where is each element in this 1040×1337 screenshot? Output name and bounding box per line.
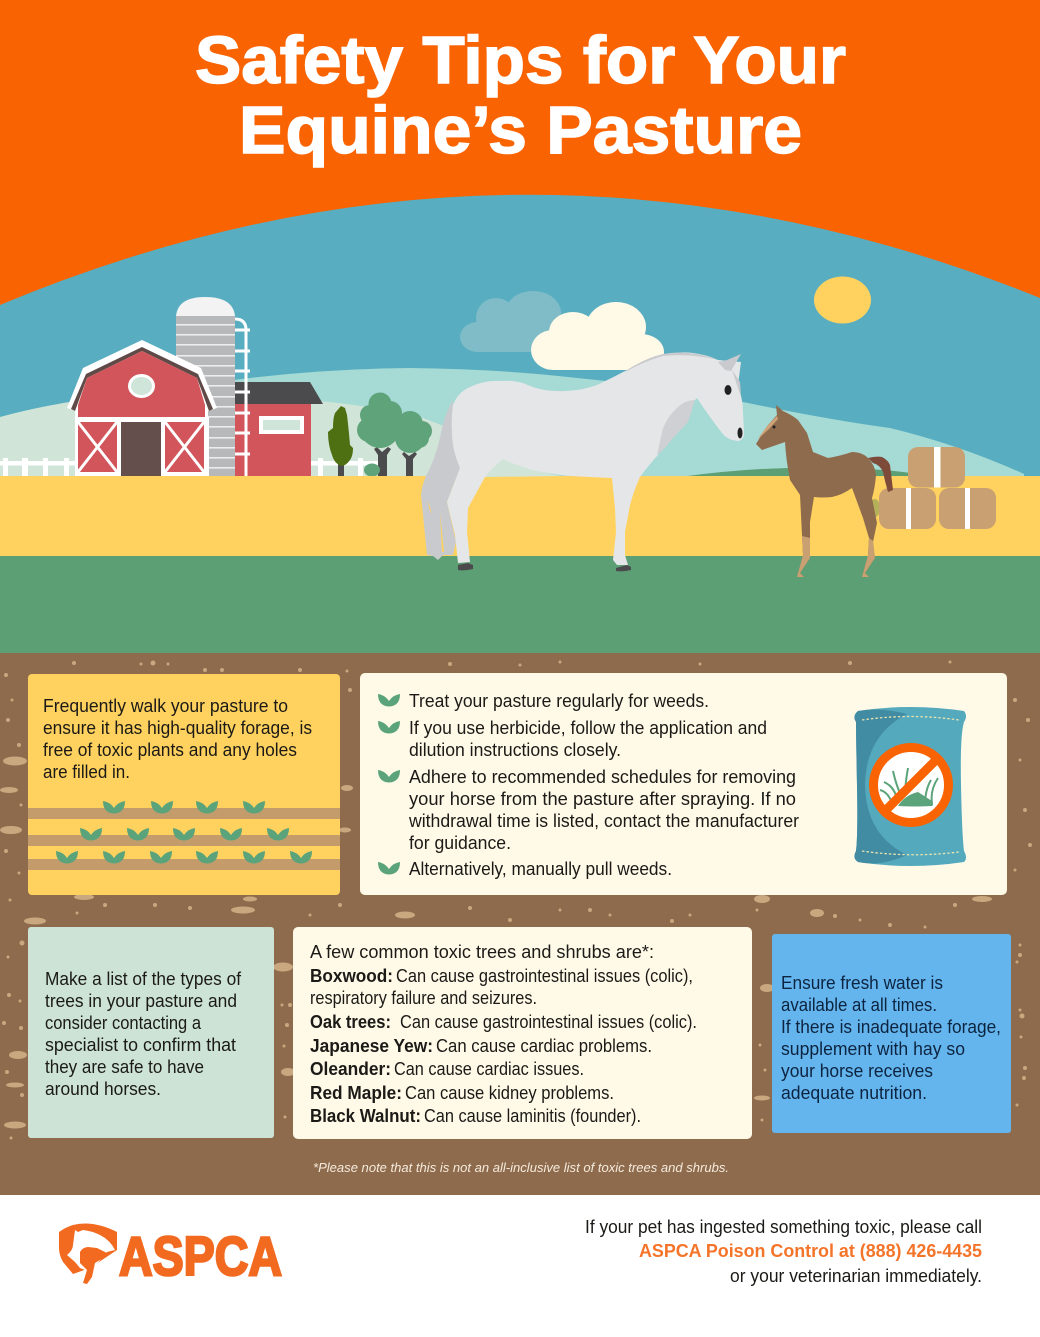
text: tree list advice: around horses. [45,1079,161,1099]
shed [235,382,323,476]
panel: toxic trees [293,927,752,1139]
bullet text: Alternatively, manually pull weeds. [409,859,672,879]
text: toxic tree list: Oleander: [310,1059,391,1079]
bullet text: If you use herbicide, follow the application and [409,718,767,738]
text: toxic tree list: Can cause laminitis (founder). [424,1106,641,1126]
text: water and forage: supplement with hay so [781,1039,965,1059]
bullet text: Treat your pasture regularly for weeds. [409,691,709,711]
text: toxic tree list: Red Maple: [310,1083,402,1103]
text: water and forage: If there is inadequate forage, [781,1017,1001,1037]
text: toxic tree list: Can cause cardiac issues. [394,1059,584,1079]
title: Safety Tips for Your [195,23,846,98]
footer contact text: If your pet has ingested something toxic, please call [585,1217,982,1237]
text: tree list advice [45,969,242,1099]
silo ladder [235,319,250,476]
text: walk your pasture: free of toxic plants and any holes [43,740,297,760]
white horse [421,352,744,571]
icon: herbicide bag [854,707,966,866]
text: toxic tree list: Can cause kidney problems. [405,1083,614,1103]
text: walk your pasture: Frequently walk your pasture to [43,696,288,716]
field and grass [0,476,1040,653]
text: water and forage: available at all times. [781,995,937,1015]
text: toxic tree list [310,942,697,1126]
panel: weed treatment [360,673,1007,895]
icon: shield with horse and dog [59,1224,117,1284]
text: toxic tree list: Japanese Yew: [310,1036,433,1056]
logo: ASPCA [59,1224,282,1287]
text: tree list advice: consider contacting a [45,1013,202,1033]
hay bales [870,447,996,529]
text: toxic tree list: Boxwood: [310,966,393,986]
sun [814,276,871,324]
bullet text: withdrawal time is listed, contact the manufacturer [408,811,799,831]
title [195,23,846,168]
soil background [0,653,1040,1195]
title: Equine’s Pasture [239,93,802,168]
text: water and forage: your horse receives [781,1061,933,1081]
text: water and forage: Ensure fresh water is [781,973,943,993]
text: toxic tree list: Can cause cardiac problems. [436,1036,652,1056]
panel: frequently walk [28,674,340,895]
text: toxic tree list: A few common toxic trees and shrubs are*: [310,942,654,962]
footer contact text: or your veterinarian immediately. [730,1266,982,1286]
footer contact text: ASPCA Poison Control at (888) 426-4435 [639,1241,982,1261]
bullet text: for guidance. [409,833,511,853]
text: toxic tree list: Black Walnut: [310,1106,421,1126]
trees [328,392,432,476]
text: toxic tree list: Oak trees: [310,1012,391,1032]
text: water and forage: adequate nutrition. [781,1083,927,1103]
foal [756,405,893,577]
text: toxic tree list: Can cause gastrointestinal issues (colic), [396,966,693,986]
text: toxic tree list: respiratory failure and seizures. [310,988,537,1008]
back cloud [460,291,561,352]
bullet text: Adhere to recommended schedules for removing [409,767,796,787]
bullet text [408,691,799,879]
panel: list of trees [28,927,274,1138]
text: toxic tree list: Can cause gastrointestinal issues (colic). [400,1012,697,1032]
bullet text: dilution instructions closely. [409,740,621,760]
title banner [0,0,1040,305]
bullet text: your horse from the pasture after spraying. If no [409,789,796,809]
text: walk your pasture [43,696,312,782]
sprouts [56,801,312,864]
soil speckles [0,660,1032,1140]
logo: ASPCA: ASPCA [119,1225,282,1287]
barn [67,340,217,476]
silo [176,297,235,476]
hills [0,368,1024,480]
text: walk your pasture: are filled in. [43,762,130,782]
front cloud [531,302,664,370]
bullet icons [378,694,400,874]
text: water and forage [781,973,1001,1103]
text: tree list advice: they are safe to have [45,1057,204,1077]
footnote: *Please note that this is not an all-inclusive list of toxic trees and shrubs. [313,1161,729,1175]
text: walk your pasture: ensure it has high-quality forage, is [43,718,312,738]
pale hill seen under the horse [485,459,560,477]
text: tree list advice: Make a list of the types of [45,969,242,989]
panel: fresh water [772,934,1011,1133]
sky background [0,0,1040,480]
fence [0,458,381,476]
text: tree list advice: specialist to confirm that [45,1035,236,1055]
soil rows [28,808,340,870]
footer background [0,1195,1040,1337]
text: tree list advice: trees in your pasture and [45,991,237,1011]
footer contact text [585,1217,982,1286]
